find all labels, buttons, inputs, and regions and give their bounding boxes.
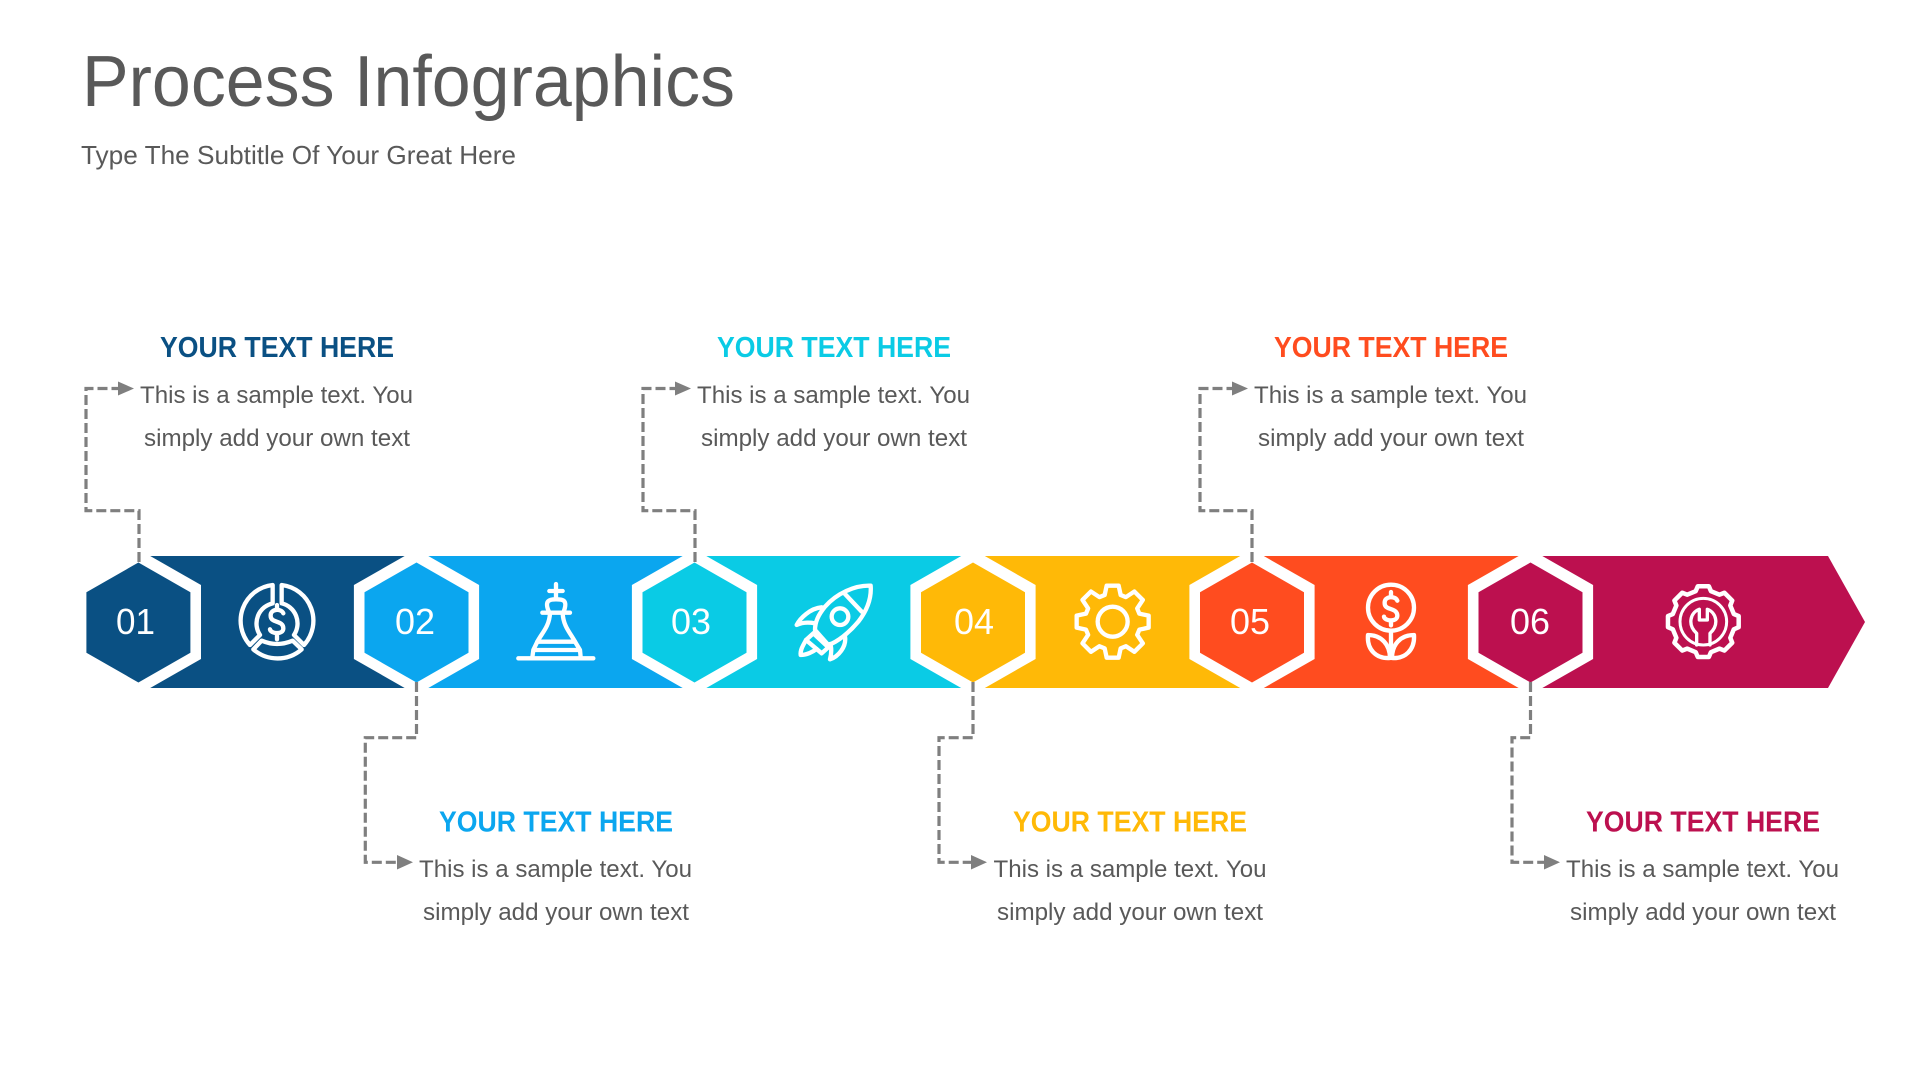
connector 06 [1512,682,1560,870]
text block 01: This is a sample text. You [140,382,413,409]
text block 04: YOUR TEXT HERE [1013,807,1247,839]
hexagon 04 [910,549,1036,695]
hexagon 05: 05 [1230,601,1270,642]
text block 03: This is a sample text. You [697,382,970,409]
hexagon 03: 03 [671,601,711,642]
text block 06: This is a sample text. You [1566,856,1839,883]
hexagon 03 [632,549,757,695]
text block 05 [1254,332,1527,452]
icon: rocket [797,586,871,659]
text block 01: YOUR TEXT HERE [160,332,394,364]
connector 03 [643,382,695,562]
text block 03: YOUR TEXT HERE [717,332,951,364]
connector 05 [1200,382,1252,562]
connector 04 [939,682,987,870]
text block 01 [140,332,413,452]
text block 06 [1566,807,1839,926]
hexagon 04: 04 [954,601,994,642]
connector 01 [86,382,139,562]
text block 02: YOUR TEXT HERE [439,807,673,839]
hexagon 06: 06 [1510,601,1550,642]
text block 03 [697,332,970,452]
process arrow band [138,556,1865,688]
hexagon 02: 02 [395,601,435,642]
text block 06: YOUR TEXT HERE [1586,807,1820,839]
hexagon 02 [354,549,479,695]
text block 05: YOUR TEXT HERE [1274,332,1508,364]
text block 04 [994,807,1266,926]
icon: dollar pie chart [241,585,313,658]
text block 04: simply add your own text [997,899,1263,926]
connector 02 [365,682,416,870]
icon: gear with wrench [1668,586,1739,657]
text block 05: This is a sample text. You [1254,382,1527,409]
text block 03: simply add your own text [701,425,967,452]
icon: gear [1077,586,1149,658]
subtitle: Type The Subtitle Of Your Great Here [81,140,516,170]
text block 05: simply add your own text [1258,425,1524,452]
hexagon 05 [1189,549,1315,695]
text block 02: simply add your own text [423,899,689,926]
text block 02: This is a sample text. You [419,856,692,883]
text block 04: This is a sample text. You [994,856,1266,883]
text block 02 [419,807,692,926]
hexagon 01 [76,549,201,695]
text block 06: simply add your own text [1570,899,1836,926]
title: Process Infographics [82,42,735,122]
hexagon 01: 01 [116,601,155,642]
text block 01: simply add your own text [144,425,410,452]
icon: money plant [1368,585,1414,658]
icon: chess king [518,584,593,658]
hexagon 06 [1468,549,1593,695]
